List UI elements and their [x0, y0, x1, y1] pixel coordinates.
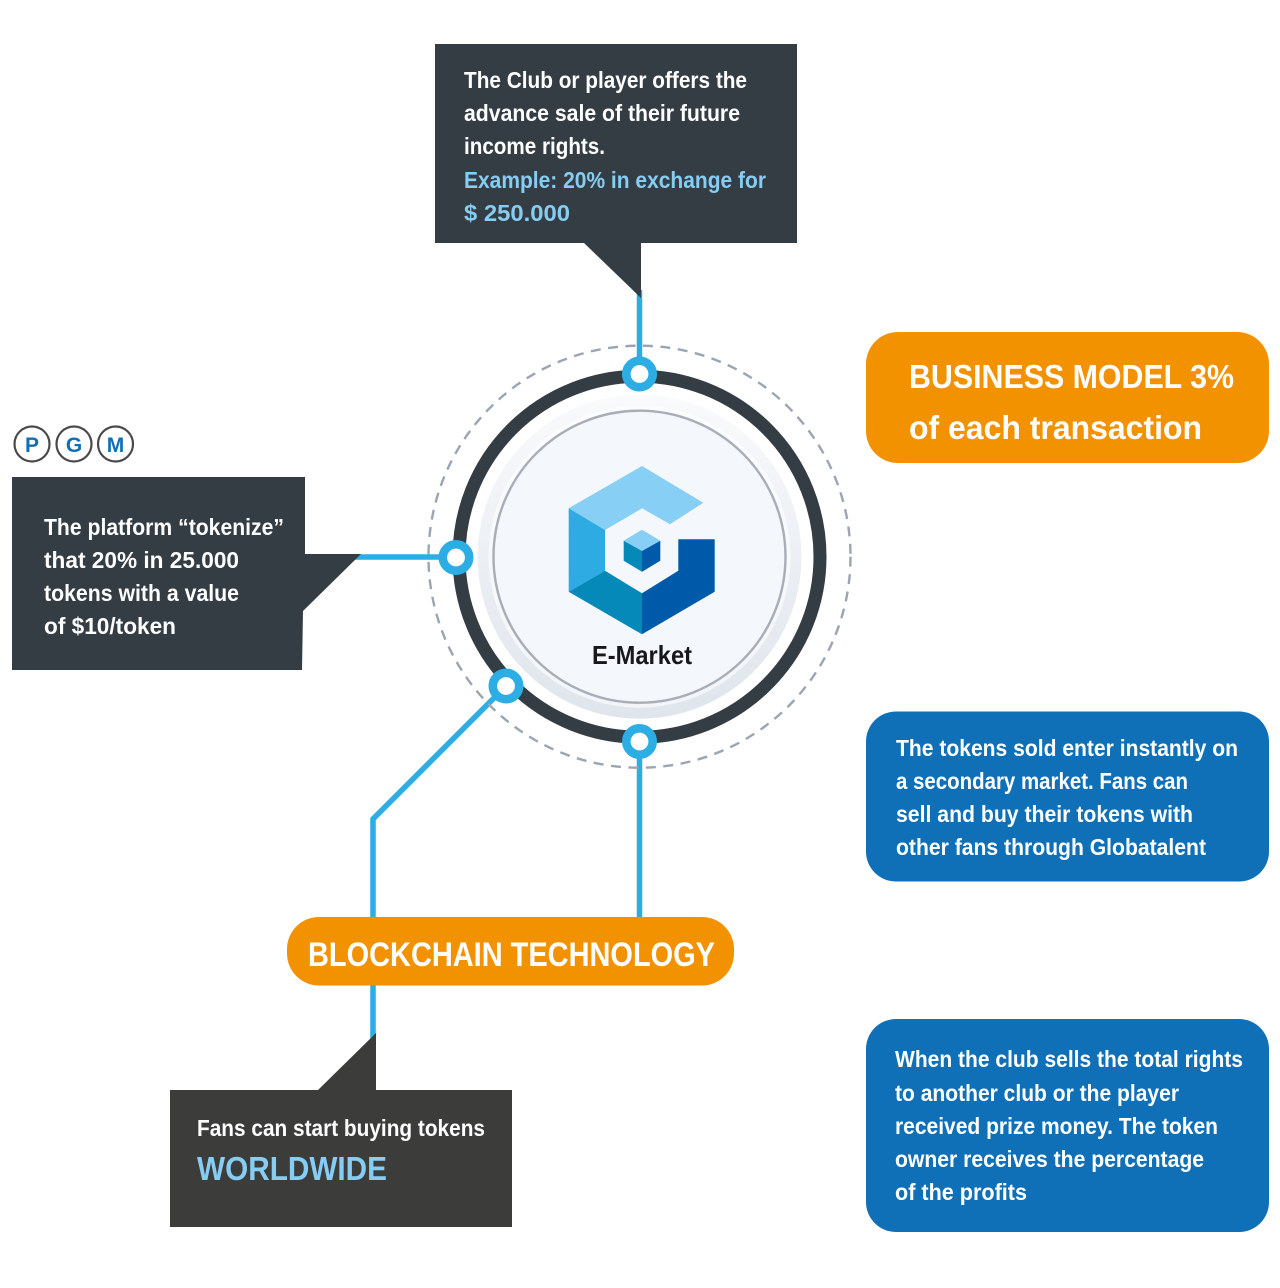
callout: club offer: advance sale of their future: [464, 100, 740, 126]
icons: P G M badges: M: [107, 434, 124, 457]
callout: secondary market: The tokens sold enter instantly on: [896, 735, 1238, 761]
callout: secondary market: other fans through Globatalent: [896, 834, 1206, 860]
node: bottom: [626, 728, 653, 755]
callout: club offer: The Club or player offers the: [464, 67, 747, 93]
callout: worldwide: [170, 1033, 512, 1227]
callout: profits: to another club or the player: [895, 1080, 1179, 1106]
node: lower left: [493, 673, 519, 699]
callout: club offer: income rights.: [464, 133, 605, 159]
label: E-Market: E-Market: [592, 640, 692, 670]
callout: worldwide: WORLDWIDE: [197, 1150, 387, 1187]
callout: secondary market: [866, 712, 1269, 882]
callout: club offer: $ 250.000: [464, 200, 570, 226]
callout: profits: owner receives the percentage: [895, 1146, 1204, 1172]
callout: profits: When the club sells the total rights: [895, 1046, 1243, 1072]
connector lines: [350, 290, 640, 1045]
central circle diagram: [428, 346, 850, 768]
callout: business model: BUSINESS MODEL 3%: [909, 358, 1234, 395]
callout: business model: [866, 332, 1269, 463]
icon: E-Market hexagon logo: [569, 466, 715, 634]
callout: tokenize: tokens with a value: [44, 580, 239, 606]
callout: business model: of each transaction: [909, 409, 1202, 446]
callout: club offer: Example: 20% in exchange for: [464, 167, 766, 193]
callout: club offer: [435, 44, 797, 298]
callout: profits: [866, 1019, 1269, 1232]
callout: blockchain technology: BLOCKCHAIN TECHNOLOGY: [308, 936, 715, 974]
callout: tokenize: The platform “tokenize”: [44, 514, 284, 540]
callout: secondary market: a secondary market. Fans can: [896, 768, 1188, 794]
callout: worldwide: Fans can start buying tokens: [197, 1115, 485, 1141]
callout: blockchain technology: [287, 917, 734, 986]
callout: tokenize: that 20% in 25.000: [44, 547, 239, 573]
icons: P G M badges: G: [66, 434, 82, 457]
callout: tokenize: [12, 477, 361, 670]
node: left: [443, 544, 469, 571]
callout: profits: received prize money. The token: [895, 1113, 1218, 1139]
node: top: [626, 361, 653, 387]
callout: tokenize: of $10/token: [44, 613, 176, 639]
callout: profits: of the profits: [895, 1179, 1027, 1205]
icons: P G M badges: P: [25, 434, 39, 457]
icons: P G M badges: [14, 426, 133, 462]
callout: secondary market: sell and buy their tokens with: [896, 801, 1193, 827]
